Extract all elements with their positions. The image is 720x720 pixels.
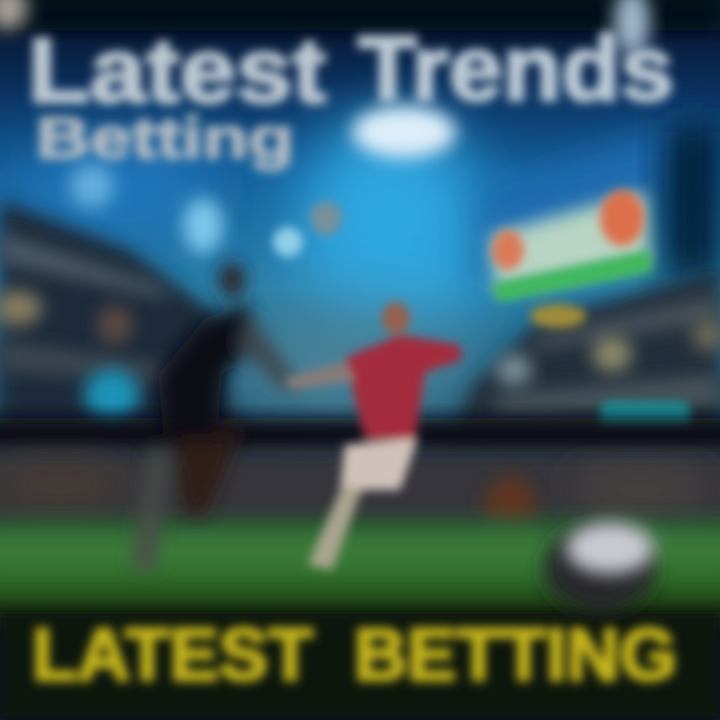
title: Latest: Latest <box>28 20 326 122</box>
sky background <box>0 0 720 480</box>
player in black <box>97 263 300 572</box>
caption: Latest Betting: LATEST BETTING <box>32 613 677 696</box>
bottom dark band <box>0 612 720 720</box>
light clouds <box>70 106 456 257</box>
stadium stands <box>0 200 720 440</box>
football <box>544 522 656 612</box>
title: Trends: Trends <box>358 18 674 120</box>
pitch <box>0 518 720 623</box>
crowd band <box>0 418 720 533</box>
player in red <box>285 302 462 570</box>
scoreboard <box>490 190 652 328</box>
subtitle: Betting: Betting <box>36 106 294 171</box>
